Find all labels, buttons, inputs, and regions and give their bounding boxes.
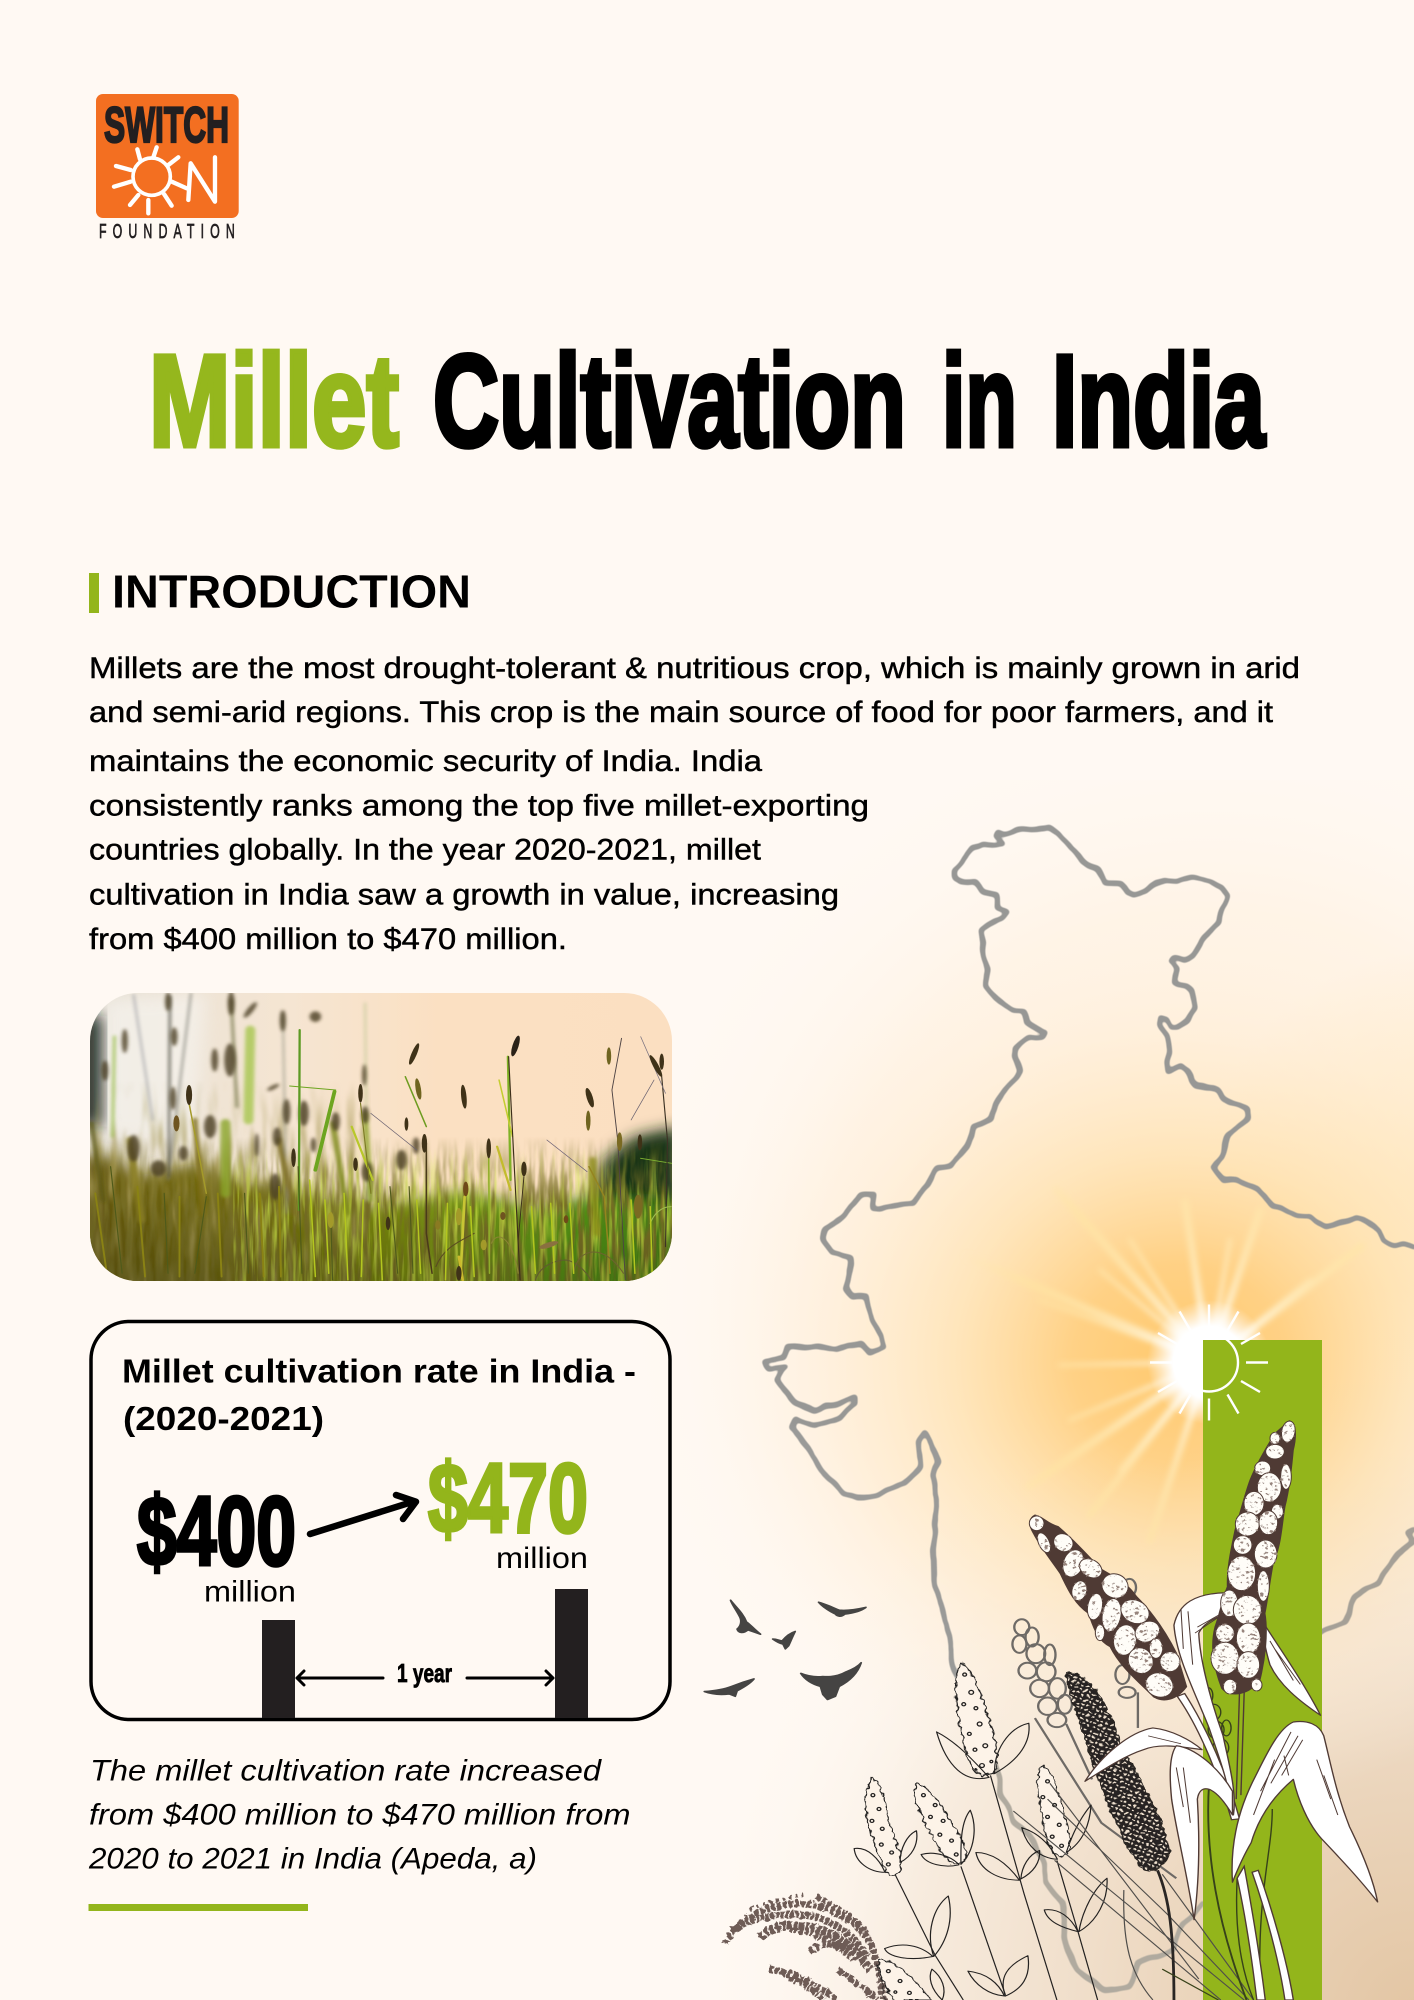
sun rays glow — [954, 1189, 1362, 1540]
value: $400 million: million — [204, 1576, 296, 1608]
logo orange square — [96, 94, 239, 218]
chart caption: from $400 million to $470 million from — [89, 1798, 630, 1832]
title word: India: India — [1052, 327, 1266, 474]
small plant five — [879, 1959, 933, 2000]
label: 1 year span: 1 year — [397, 1658, 452, 1688]
green vertical band — [1203, 1340, 1322, 2000]
illustration: birds and millet plants — [704, 1420, 1378, 2000]
small plant one — [937, 1663, 1057, 2000]
map: east coast — [1317, 1528, 1414, 1635]
caption underline — [88, 1904, 308, 1911]
introduction paragraph — [89, 652, 1300, 956]
chart caption: The millet cultivation rate increased — [90, 1754, 602, 1788]
title word: Millet: Millet — [149, 327, 399, 474]
small plant three — [915, 1783, 1029, 1996]
value: $470 million — [428, 1443, 588, 1575]
sun outline icon — [1150, 1304, 1268, 1420]
arrow: growth — [310, 1495, 416, 1534]
maroon millet sprays — [725, 1895, 885, 2000]
dark green stems on band — [1162, 1783, 1272, 2000]
heading accent bar — [89, 573, 99, 613]
section heading: Introduction — [89, 566, 471, 618]
title word: in: in — [942, 327, 1017, 474]
photo: millet field — [80, 990, 680, 1297]
logo wordmark SWITCH: SWITCH — [104, 97, 229, 153]
introduction paragraph: countries globally. In the year 2020-2021, millet — [89, 834, 762, 866]
large millet head on band — [1211, 1420, 1297, 1694]
large millet head diagonal — [1029, 1515, 1187, 1701]
map of India outline — [764, 828, 1414, 1990]
logo sun and N icon — [114, 147, 215, 213]
photo: sharp seed heads — [173, 1035, 664, 1281]
photo: out of focus seed heads — [101, 991, 419, 1200]
photo: grass texture — [80, 1080, 680, 1290]
label: 1 year span — [297, 1658, 553, 1688]
sun white core — [1147, 1300, 1271, 1424]
title — [149, 327, 1266, 474]
chart caption: 2020 to 2021 in India (Apeda, a) — [88, 1842, 537, 1876]
small plant two — [854, 1777, 963, 2000]
chart caption — [88, 1754, 631, 1876]
bar: 2021 — [555, 1589, 588, 1718]
value: $400 million — [137, 1476, 296, 1608]
photo: out of focus stems — [91, 993, 597, 1233]
map: southern tip — [996, 1760, 1203, 1990]
introduction paragraph: cultivation in India saw a growth in value, increasing — [89, 878, 839, 912]
panel heading — [122, 1352, 636, 1437]
introduction paragraph: from $400 million to $470 million. — [89, 923, 567, 956]
photo: sharp grass blades — [95, 1030, 672, 1280]
small plant four — [1022, 1766, 1107, 2000]
value: $470 million: million — [496, 1542, 588, 1575]
title word: Cultivation: Cultivation — [433, 327, 906, 474]
map: north and west border — [764, 828, 1414, 1429]
panel: cultivation rate chart — [91, 1322, 670, 1720]
panel frame — [91, 1322, 670, 1720]
fan of straight stems — [1013, 1783, 1254, 2000]
logo: Switch On Foundation — [96, 94, 239, 243]
large plant: stems — [1177, 1692, 1293, 2000]
birds — [704, 1600, 866, 1699]
value: $400 million: $400 — [137, 1476, 296, 1586]
small plant heads with leaves — [854, 1663, 1107, 2000]
background glow and watercolour wash — [560, 780, 1414, 2000]
introduction paragraph: maintains the economic security of India. India — [89, 745, 762, 778]
introduction paragraph: Millets are the most drought-tolerant & nutritious crop, which is mainly grown in arid — [89, 652, 1300, 685]
introduction paragraph: consistently ranks among the top five millet-exporting — [89, 790, 869, 822]
logo wordmark FOUNDATION: FOUNDATION — [99, 220, 235, 243]
dark bristly millet head — [1066, 1672, 1174, 2000]
green outline seed head — [1201, 1688, 1231, 1786]
panel heading: (2020-2021) — [123, 1400, 324, 1437]
heading text: INTRODUCTION — [112, 566, 471, 618]
map: west coast — [793, 1427, 996, 1760]
bar: 2020 — [262, 1620, 295, 1718]
panel heading: Millet cultivation rate in India - — [122, 1352, 636, 1390]
back plant: grey outline head — [1012, 1579, 1176, 1878]
large plant: leaves — [1085, 1593, 1378, 1920]
value: $470 million: $470 — [428, 1443, 588, 1553]
introduction paragraph: and semi-arid regions. This crop is the main source of food for poor farmers, and it — [89, 696, 1274, 729]
